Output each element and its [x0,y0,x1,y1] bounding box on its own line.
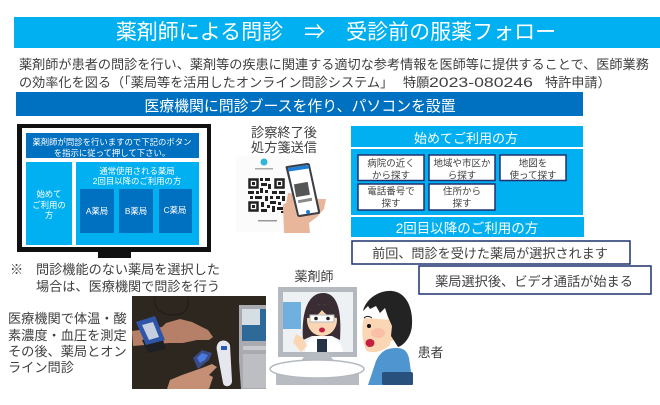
table [270,360,364,385]
returning users heading [351,217,584,237]
regular pharmacy panel: C薬局 [164,205,186,215]
option: region [429,155,495,182]
note text: ※ [10,262,23,277]
illustration: pharmacist on monitor and patient [270,287,413,385]
note text: 問診機能のない薬局を選択した [36,262,220,277]
note text [10,262,220,294]
section heading bar [16,92,583,116]
description text: の効率化を図る（「薬局等を活用したオンライン問診システム」 [19,74,393,90]
search options panel [351,149,583,215]
instruction panel [26,133,199,158]
hospital measurement text: 医療機関で体温・酸 [8,311,127,326]
hospital measurement text: 素濃度・血圧を測定 [8,328,127,343]
option: map: 地図を [519,158,547,170]
option: phone number [358,184,424,210]
returning users heading: 2回目以降のご利用の方 [396,221,538,236]
option: near hospital [358,155,424,182]
label: patient: 患者 [418,345,444,360]
prescription caption: 診察終了後 [251,125,317,140]
description text: 特許申請） [545,75,611,90]
first-time users heading [351,126,583,147]
option: near hospital: 病院の近く [367,158,415,170]
first-time button [26,162,72,245]
hospital measurement text: その後、薬局とオン [8,344,127,359]
callout: video call [419,266,651,294]
regular pharmacy panel: B薬局 [125,206,147,216]
hospital measurement text: ライン問診 [8,360,74,375]
regular pharmacy panel: 通常使用される薬局 [99,166,175,176]
patient [362,291,413,385]
QR code and phone image [236,156,326,233]
description text: 2023-080246 [429,74,533,90]
note text: 場合は、医療機関で問診を行う [36,279,220,294]
callout: previous pharmacy: 前回、問診を受けた薬局が選択されます [372,245,608,261]
option: phone number: 電話番号で [367,186,415,198]
prescription caption [251,125,317,155]
option: address [429,184,495,210]
regular pharmacy panel: 2回目以降のご利用の方 [93,176,181,186]
callout: previous pharmacy [352,241,630,264]
regular pharmacy panel [76,162,199,245]
title banner [14,17,660,48]
first-time button: ご利用の [32,200,66,210]
title banner: 薬剤師による問診 ⇒ 受診前の服薬フォロー [116,21,556,44]
monitor screen mockup [17,124,211,258]
first-time button: 方 [45,210,53,220]
option: address: 探す [452,198,472,210]
instruction panel: を指示に従って押して下さい。 [54,148,170,158]
description text: 薬剤師が患者の問診を行い、薬剤等の疾患に関連する適切な参考情報を医師等に提供することで、医師業務 [19,56,649,72]
option: phone number: 探す [381,198,401,210]
option: region: ら探す [448,170,476,182]
option: map: 使って探す [509,170,557,182]
regular pharmacy panel: A薬局 [86,206,108,216]
option: map [500,155,566,182]
photo: vital sign devices [132,296,266,389]
first-time users heading: 始めてご利用の方 [414,131,518,146]
option: near hospital: から探す [372,170,410,182]
description text: 特願 [403,75,429,90]
instruction panel: 薬剤師が問診を行いますので下記のボタン [32,137,192,147]
monitor with pharmacist [278,287,357,366]
option: region: 地域や市区か [433,158,491,170]
first-time button: 始めて [36,189,62,199]
hospital measurement text [8,311,127,375]
label: pharmacist: 薬剤師 [294,269,334,284]
description text [19,56,649,90]
callout: video call: 薬局選択後、ビデオ通話が始まる [435,273,633,289]
prescription caption: 処方箋送信 [251,140,317,155]
option: address: 住所から [443,186,481,198]
section heading bar: 医療機関に問診ブースを作り、パソコンを設置 [144,97,456,115]
